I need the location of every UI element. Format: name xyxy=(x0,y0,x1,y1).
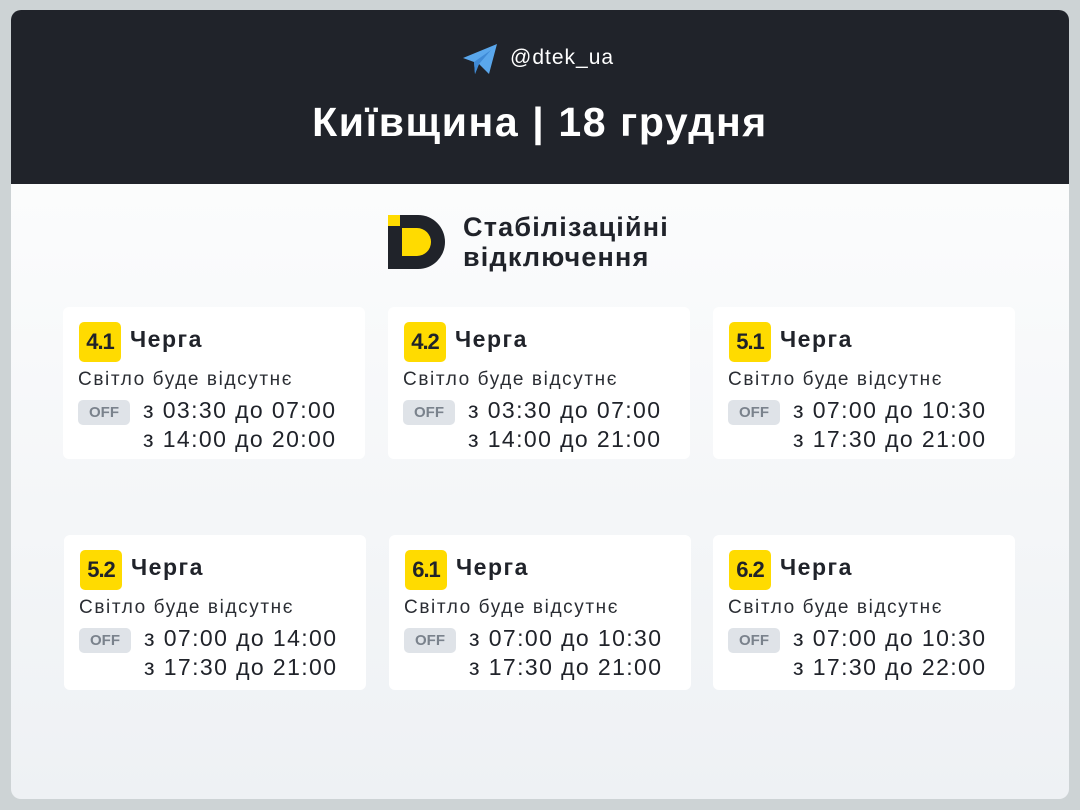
heading: відключення xyxy=(463,242,650,272)
card 4.1: Черга xyxy=(130,326,203,352)
card 6.2: OFF xyxy=(739,632,769,649)
card 6.2 xyxy=(713,535,1015,690)
card 5.1 xyxy=(713,307,1015,459)
card 6.2: 6.2 xyxy=(736,557,764,582)
card 5.2: Черга xyxy=(131,554,204,580)
card 6.1: Світло буде відсутнє xyxy=(404,597,619,618)
card 4.1: з 03:30 до 07:00 xyxy=(143,397,336,423)
card 4.2: з 14:00 до 21:00 xyxy=(468,426,661,452)
card 5.1: Світло буде відсутнє xyxy=(728,369,943,390)
icon: telegram xyxy=(463,44,497,74)
card 6.2: Черга xyxy=(780,554,853,580)
card 5.2 xyxy=(64,535,366,690)
card 6.2: Світло буде відсутнє xyxy=(728,597,943,618)
card 4.1: OFF xyxy=(89,404,119,421)
card 4.1: з 14:00 до 20:00 xyxy=(143,426,336,452)
card 4.2: 4.2 xyxy=(411,329,439,354)
heading: Стабілізаційні xyxy=(463,212,669,242)
card 5.2: з 17:30 до 21:00 xyxy=(144,654,337,680)
card 5.1: з 07:00 до 10:30 xyxy=(793,397,986,423)
card 6.2: з 07:00 до 10:30 xyxy=(793,625,986,651)
card 6.1 xyxy=(389,535,691,690)
heading xyxy=(463,212,669,272)
title: Київщина | 18 грудня xyxy=(312,99,768,145)
card 5.1: 5.1 xyxy=(736,329,764,354)
card 4.2: Світло буде відсутнє xyxy=(403,369,618,390)
header xyxy=(11,10,1069,184)
card 4.1 xyxy=(63,307,365,459)
card 4.1: Світло буде відсутнє xyxy=(78,369,293,390)
card 5.2: OFF xyxy=(90,632,120,649)
card 6.1: з 07:00 до 10:30 xyxy=(469,625,662,651)
card 6.1: Черга xyxy=(456,554,529,580)
logo xyxy=(388,215,445,269)
card 4.2: Черга xyxy=(455,326,528,352)
card 5.2: Світло буде відсутнє xyxy=(79,597,294,618)
card 5.1: з 17:30 до 21:00 xyxy=(793,426,986,452)
card 6.1: OFF xyxy=(415,632,445,649)
card 5.1: Черга xyxy=(780,326,853,352)
card 6.1: з 17:30 до 21:00 xyxy=(469,654,662,680)
card 5.2: з 07:00 до 14:00 xyxy=(144,625,337,651)
card 4.1: 4.1 xyxy=(86,329,114,354)
card 6.2: з 17:30 до 22:00 xyxy=(793,654,986,680)
card 5.1: OFF xyxy=(739,404,769,421)
card 5.2: 5.2 xyxy=(87,557,115,582)
card 4.2: OFF xyxy=(414,404,444,421)
handle: @dtek_ua xyxy=(510,46,614,69)
card 4.2 xyxy=(388,307,690,459)
card 4.2: з 03:30 до 07:00 xyxy=(468,397,661,423)
card 6.1: 6.1 xyxy=(412,557,440,582)
